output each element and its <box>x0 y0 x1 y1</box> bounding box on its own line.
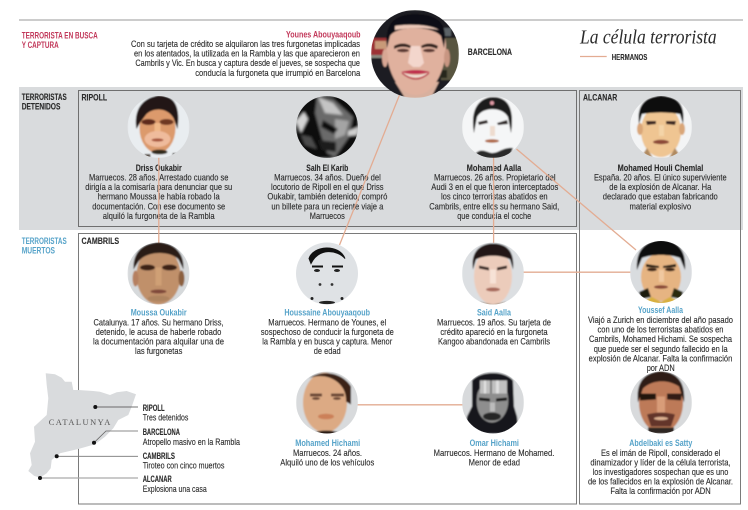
text: Mohamed Houli Chemlal: Mohamed Houli Chemlal <box>618 163 703 174</box>
text: Younes Abouyaaqoub <box>131 29 361 79</box>
text: Driss Oukabir <box>85 163 232 222</box>
text: Mohamed Aalla: Mohamed Aalla <box>467 163 522 174</box>
text: Houssaine Abouyaaqoub: de edad <box>314 346 341 357</box>
map label: CATALUNYA <box>49 418 110 427</box>
text: Mohamed Hichami: Marruecos. 24 años. <box>293 448 362 459</box>
label: terrorista en busca y captura: Y CAPTURA <box>22 40 59 51</box>
text: Mohamed Aalla: que conducía el coche <box>457 211 531 222</box>
legend: hermanos: HERMANOS <box>612 52 648 62</box>
map legend <box>143 403 240 495</box>
text: Abdelbaki es Satty <box>588 438 733 497</box>
photo: Salh El Karib <box>296 96 358 158</box>
text: Mohamed Aalla: Audi 3 en el que fueron interceptados <box>431 182 558 193</box>
text: Salh El Karib <box>267 163 387 222</box>
text: Driss Oukabir: Marruecos. 28 años. Arrestado cuando se <box>89 172 228 184</box>
connector: Mohamed Aalla - Said <box>493 156 495 243</box>
photo: Said Aalla <box>462 242 524 306</box>
photo: Driss Oukabir <box>128 96 190 158</box>
map legend: RIPOLL <box>143 403 165 414</box>
text: Houssaine Abouyaaqoub: sospechoso de conducir la furgoneta de <box>261 327 394 338</box>
text: Mohamed Houli Chemlal: de la explosión de Alcanar. Ha <box>609 182 712 193</box>
label: terroristas muertos <box>22 236 67 256</box>
photo: Houssaine Abouyaaqoub <box>296 242 358 304</box>
photo: Omar Hichami <box>462 372 524 434</box>
text: Said Aalla: Marruecos. 19 años. Su tarjeta de <box>437 318 551 328</box>
text: Driss Oukabir: documentación. Con ese documento se <box>92 201 225 212</box>
text: Youssef Aalla: por ADN <box>647 363 675 374</box>
text: Omar Hichami: Marruecos. Hermano de Mohamed. <box>434 448 554 459</box>
label: terroristas muertos: MUERTOS <box>22 246 55 256</box>
text: Moussa Oukabir: la documentación para alquilar una de <box>93 337 224 348</box>
text: Younes Abouyaaqoub: en los atentados, la utilizada en la Rambla y las que aparecieron en <box>134 49 360 60</box>
photo: Mohamed Aalla <box>462 96 524 158</box>
label: terroristas muertos: TERRORISTAS <box>22 236 67 247</box>
map legend: Tres detenidos <box>143 412 189 424</box>
photo: Mohamed Hichami <box>296 372 358 434</box>
text: Said Aalla: Kangoo abandonada en Cambrils <box>438 337 550 348</box>
panel: alcanar <box>580 90 740 504</box>
label: barcelona: BARCELONA <box>468 47 512 58</box>
text: Houssaine Abouyaaqoub: la Rambla y en busca y captura. Menor <box>262 337 393 348</box>
heading: alcanar: ALCANAR <box>583 92 617 104</box>
text: Salh El Karib: Oukabir, también detenido, compró <box>267 192 387 203</box>
text: Salh El Karib: Salh El Karib <box>306 163 348 174</box>
text: Driss Oukabir: alquiló la furgoneta de la Rambla <box>103 211 215 222</box>
text: Salh El Karib: un billete para un reciente viaje a <box>271 201 384 212</box>
text: Said Aalla <box>437 308 551 348</box>
text: Mohamed Houli Chemlal: declarado que estaban fabricando <box>603 192 718 203</box>
text: Mohamed Houli Chemlal <box>594 163 727 212</box>
text: Houssaine Abouyaaqoub: Marruecos. Hermano de Younes, el <box>268 318 386 328</box>
text: Mohamed Hichami: Mohamed Hichami <box>295 438 360 449</box>
text: Omar Hichami <box>434 438 554 468</box>
photo: Younes Abouyaaqoub <box>371 10 459 98</box>
photo: Mohamed Houli Chemlal <box>630 96 692 158</box>
text: Younes Abouyaaqoub: Con su tarjeta de crédito se alquilaron las tres furgonetas implicadas <box>131 39 360 50</box>
title: La célula terrorista <box>579 26 717 48</box>
text: Younes Abouyaaqoub: Younes Abouyaaqoub <box>286 29 361 40</box>
text: Said Aalla: Said Aalla <box>477 308 511 318</box>
text: Omar Hichami: Menor de edad <box>469 458 520 468</box>
panel: cambrils <box>78 234 576 504</box>
text: Moussa Oukabir: Catalunya. 17 años. Su hermano Driss, <box>94 318 224 328</box>
connector: Mohamed Hichami - Omar <box>357 404 463 406</box>
text: Mohamed Aalla: Cambrils, entre ellos su hermano Said, <box>429 201 559 212</box>
text: Driss Oukabir: hermano Moussa le había robado la <box>98 192 220 203</box>
text: Moussa Oukabir: las furgonetas <box>135 346 183 357</box>
text: Youssef Aalla <box>588 305 733 374</box>
connector: Younes - Houssaine <box>340 95 400 245</box>
text: Moussa Oukabir <box>93 308 224 357</box>
photo: Moussa Oukabir <box>128 242 190 304</box>
panel: ripoll <box>78 90 576 226</box>
text: Salh El Karib: Marruecos. 34 años. Dueño del <box>274 172 381 184</box>
map legend: ALCANAR <box>143 474 172 485</box>
label: terrorista en busca y captura <box>22 30 98 51</box>
text: Driss Oukabir: Driss Oukabir <box>136 163 182 174</box>
text: Said Aalla: crédito apareció en la furgoneta <box>440 327 548 338</box>
label: terroristas detenidos: DETENIDOS <box>22 102 61 112</box>
connector: Mohamed Aalla - Youssef <box>516 149 636 250</box>
text: Salh El Karib: Marruecos <box>310 211 345 222</box>
text: Salh El Karib: locutorio de Ripoll en el que Driss <box>271 182 384 193</box>
map legend: Explosiona una casa <box>143 484 207 495</box>
legend: hermanos <box>580 52 648 62</box>
map legend: BARCELONA <box>143 427 180 438</box>
text: Houssaine Abouyaaqoub <box>261 308 394 357</box>
text: Mohamed Hichami: Alquiló uno de los vehículos <box>280 458 374 468</box>
text: Younes Abouyaaqoub: conducía la furgoneta que irrumpió en Barcelona <box>195 68 361 79</box>
text: Abdelbaki es Satty: Falta la confirmación por ADN <box>610 486 711 497</box>
map marker lines <box>38 405 138 480</box>
photo: Abdelbaki es Satty <box>630 372 692 434</box>
text: Moussa Oukabir: detenido, le acusa de haberle robado <box>96 327 221 338</box>
label: terrorista en busca y captura: TERRORISTA EN BUSCA <box>22 30 98 42</box>
text: Mohamed Aalla: Marruecos. 26 años. Propietario del <box>434 172 556 184</box>
map: Catalunya <box>28 373 136 478</box>
map legend: Atropello masivo en la Rambla <box>143 437 240 448</box>
text: Moussa Oukabir: Moussa Oukabir <box>131 308 187 318</box>
text: Younes Abouyaaqoub: Cambrils y Vic. En busca y captura desde el jueves, se sospecha que <box>135 58 360 69</box>
text: Mohamed Hichami <box>280 438 374 468</box>
map legend: CAMBRILS <box>143 451 175 462</box>
text: Mohamed Aalla: los cinco terroristas abatidos en <box>441 192 548 203</box>
heading: ripoll: RIPOLL <box>82 92 107 104</box>
text: Driss Oukabir: dirigía a la comisaría para denunciar que su <box>85 182 232 193</box>
text: Houssaine Abouyaaqoub: Houssaine Abouyaaqoub <box>284 308 370 318</box>
photo: Youssef Aalla <box>630 240 692 304</box>
label: terroristas detenidos <box>22 92 67 112</box>
label: terroristas detenidos: TERRORISTAS <box>22 92 67 103</box>
text: Youssef Aalla: Youssef Aalla <box>638 305 683 316</box>
text: Abdelbaki es Satty: Abdelbaki es Satty <box>629 438 693 449</box>
text: Omar Hichami: Omar Hichami <box>470 438 519 449</box>
text: Mohamed Houli Chemlal: material explosivo <box>629 201 691 212</box>
connector: Driss - Moussa <box>158 156 160 243</box>
text: Mohamed Aalla <box>429 163 559 222</box>
map shape <box>28 373 136 478</box>
map legend: Tiroteo con cinco muertos <box>143 460 225 472</box>
connector: Said - Youssef <box>523 271 631 273</box>
heading: cambrils: CAMBRILS <box>82 236 120 247</box>
